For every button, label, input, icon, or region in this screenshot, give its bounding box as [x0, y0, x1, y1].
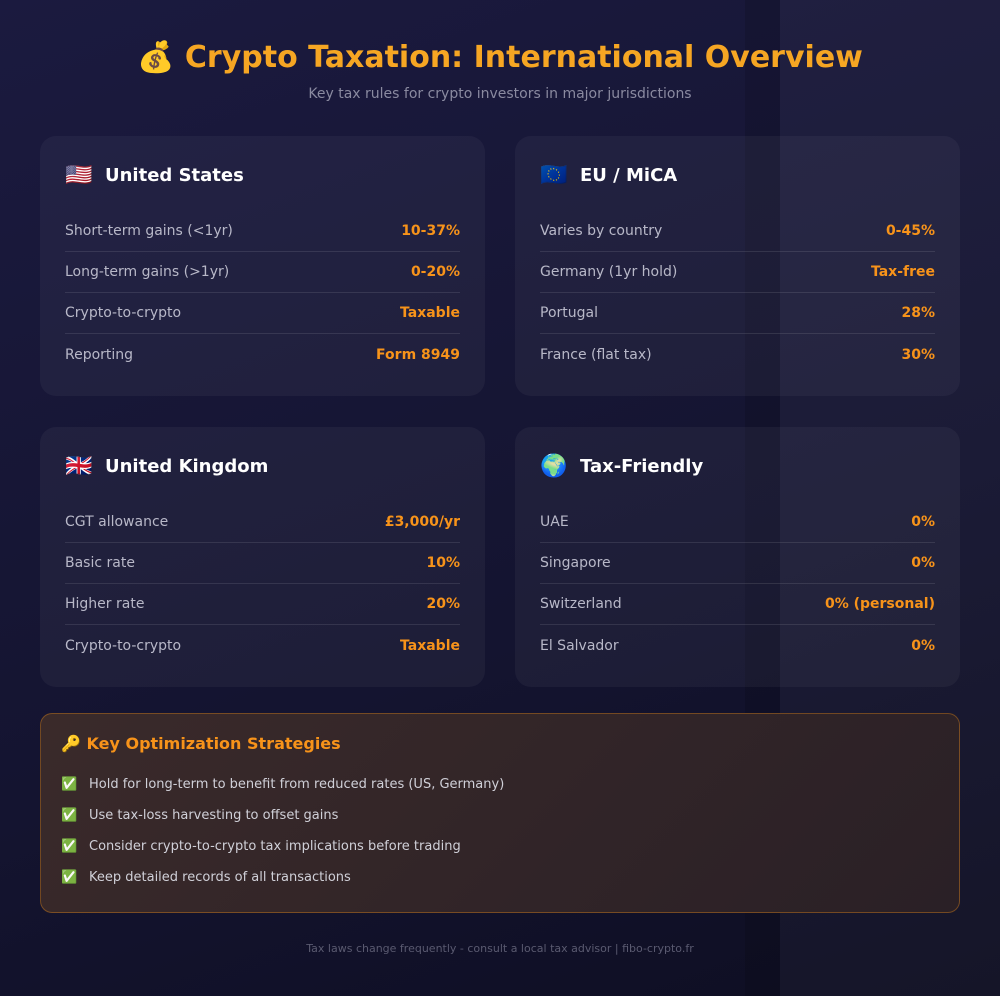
rows: EU: Tax-free: [871, 264, 935, 280]
rows: UK: Crypto-to-crypto: [65, 638, 181, 654]
panel: United States: [40, 136, 485, 396]
rows: EU: 30%: [901, 346, 935, 362]
heading: EU: 🇪🇺: [540, 162, 567, 188]
heading: United States: [65, 162, 244, 188]
rows: US: Form 8949: [376, 346, 460, 362]
rows: tax-friendly: 0%: [911, 638, 935, 654]
rows: tax-friendly: El Salvador: [540, 638, 619, 654]
rows: US: Taxable: [400, 305, 460, 321]
rows: tax-friendly: Switzerland: [540, 596, 622, 612]
title: 💰 Crypto Taxation: International Overview: [137, 40, 863, 75]
rows: UK: Basic rate: [65, 555, 135, 571]
rows: US: 0-20%: [411, 264, 460, 280]
rows: tax-friendly: 0% (personal): [825, 596, 935, 612]
heading: EU: EU / MiCA: [580, 164, 677, 186]
rows: EU: 28%: [901, 305, 935, 321]
rows: US: 10-37%: [401, 223, 460, 239]
rows: UK: Taxable: [400, 638, 460, 654]
heading: United States: United States: [105, 164, 244, 186]
rows: US: Short-term gains (<1yr): [65, 223, 233, 239]
list: strategies: Hold for long-term to benefit from reduced rates (US, Germany): [89, 777, 504, 792]
rows: EU: France (flat tax): [540, 346, 652, 362]
rows: UK: 10%: [426, 555, 460, 571]
heading: UK: United Kingdom: [105, 456, 268, 476]
rows: US: Reporting: [65, 346, 133, 362]
list: strategies: [61, 776, 504, 885]
rows: UK: £3,000/yr: [385, 514, 460, 530]
rows: tax-friendly: 0%: [911, 555, 935, 571]
rows: tax-friendly: UAE: [540, 514, 569, 530]
list: strategies: ✅: [61, 870, 77, 885]
list: strategies: ✅: [61, 839, 77, 854]
footer: Tax laws change frequently - consult a local tax advisor | fibo-crypto.fr: [306, 942, 694, 955]
rows: UK: Higher rate: [65, 596, 144, 612]
list: strategies: Keep detailed records of all transactions: [89, 870, 351, 885]
heading: United States: 🇺🇸: [65, 162, 92, 188]
rows: EU: Varies by country: [540, 223, 662, 239]
rows: EU: Germany (1yr hold): [540, 264, 677, 280]
heading: Tax-Friendly: 🌍: [540, 454, 567, 478]
subtitle: Key tax rules for crypto investors in major jurisdictions: [308, 86, 692, 102]
list: strategies: Use tax-loss harvesting to offset gains: [89, 808, 338, 823]
rows: tax-friendly: Singapore: [540, 555, 611, 571]
heading: strategies: 🔑 Key Optimization Strategies: [61, 734, 341, 753]
rows: UK: CGT allowance: [65, 514, 168, 530]
rows: EU: [540, 223, 935, 362]
heading: UK: [65, 454, 268, 478]
rows: UK: 20%: [426, 596, 460, 612]
rows: tax-friendly: [540, 514, 935, 654]
heading: UK: 🇬🇧: [65, 454, 92, 478]
rows: US: Crypto-to-crypto: [65, 305, 181, 321]
rows: tax-friendly: 0%: [911, 514, 935, 530]
heading: EU: [540, 162, 678, 188]
list: strategies: ✅: [61, 808, 77, 823]
list: strategies: Consider crypto-to-crypto tax implications before trading: [89, 839, 461, 854]
panel: United Kingdom: [40, 427, 485, 687]
rows: EU: 0-45%: [886, 223, 935, 239]
panel: EU / MiCA: [515, 136, 960, 396]
panel: Tax-Friendly: [515, 427, 960, 687]
list: strategies: ✅: [61, 777, 77, 792]
rows: US: Long-term gains (>1yr): [65, 264, 229, 280]
heading: Tax-Friendly: [540, 454, 703, 478]
rows: US: [65, 223, 460, 362]
heading: Tax-Friendly: Tax-Friendly: [580, 456, 703, 476]
rows: UK: [65, 514, 460, 654]
panel: strategies: [40, 713, 960, 913]
rows: EU: Portugal: [540, 305, 598, 321]
